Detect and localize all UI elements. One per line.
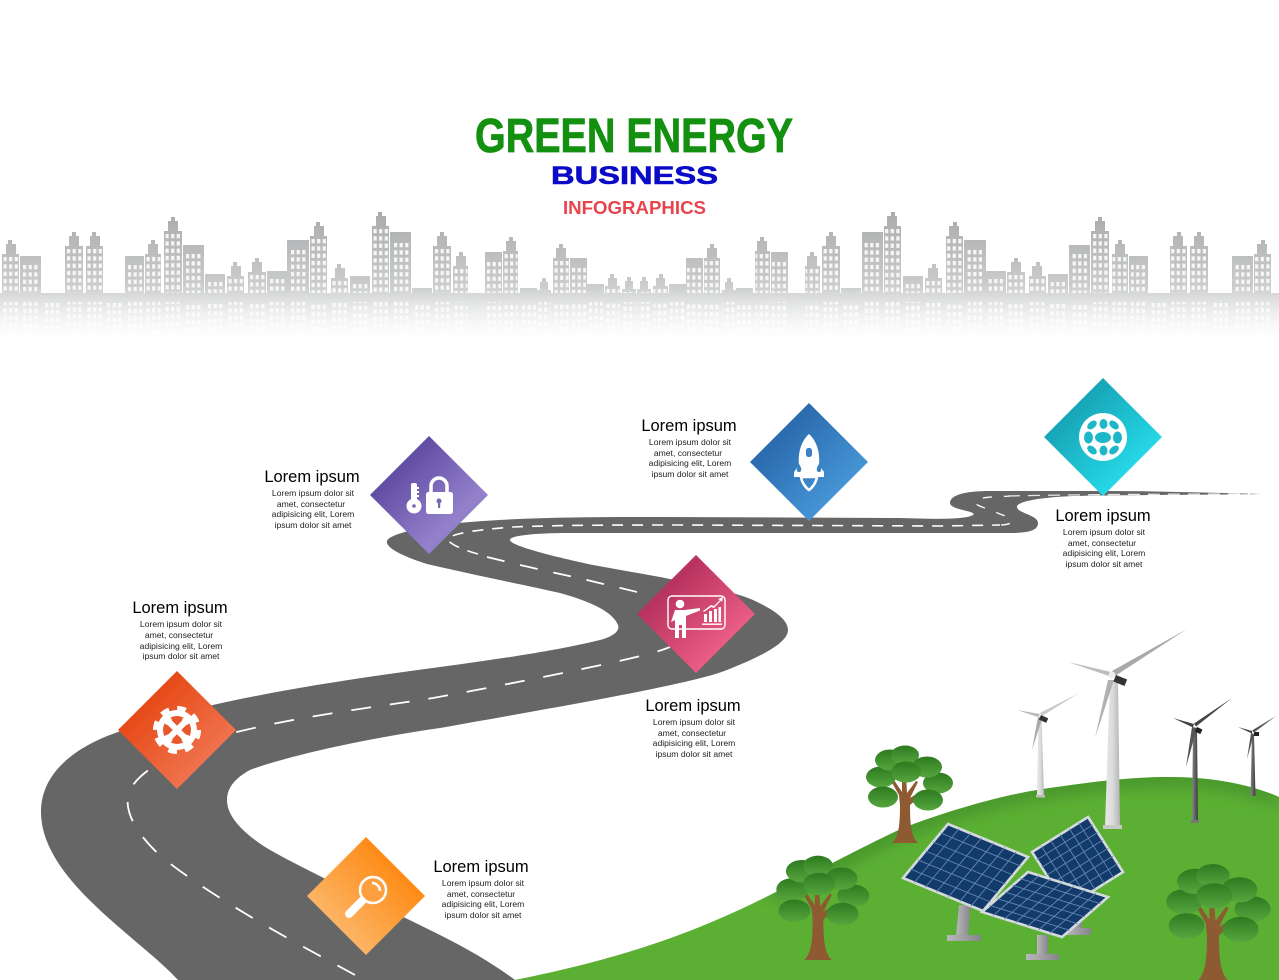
text block: orange step: Lorem ipsum — [433, 858, 529, 876]
step 3: pink diamond — [637, 555, 755, 673]
tree: right — [1166, 864, 1271, 980]
text block: blue step: amet, consectetur — [654, 448, 722, 458]
text block: purple step: Lorem ipsum — [264, 468, 360, 486]
text block: orange step: adipisicing elit, Lorem — [442, 899, 524, 909]
text block: cyan step: adipisicing elit, Lorem — [1063, 548, 1145, 558]
text block: purple step: ipsum dolor sit amet — [275, 520, 352, 530]
text block: purple step: amet, consectetur — [277, 499, 345, 509]
title line: green energy: GREEN ENERGY — [475, 110, 793, 163]
solar panel: back right — [1032, 817, 1123, 907]
text block: cyan step: Lorem ipsum — [1055, 507, 1151, 525]
step 4: purple diamond — [370, 436, 488, 554]
text block: red step: ipsum dolor sit amet — [143, 651, 220, 661]
wind turbine: dark medium — [1173, 698, 1232, 823]
text block: cyan step — [1055, 507, 1151, 569]
tree: upper — [866, 746, 953, 843]
text block: pink step: amet, consectetur — [658, 728, 726, 738]
text block: pink step — [645, 697, 741, 759]
text block: purple step — [264, 468, 360, 530]
text block: orange step: ipsum dolor sit amet — [445, 910, 522, 920]
text block: orange step — [433, 858, 529, 920]
panel stand: back — [1065, 900, 1091, 935]
step 5: blue diamond — [750, 403, 868, 521]
wind turbine: dark small — [1238, 716, 1276, 796]
text block: red step — [132, 599, 228, 661]
text block: blue step: Lorem ipsum dolor sit — [649, 437, 732, 447]
step 2: orange diamond — [307, 837, 425, 955]
solar panel: front — [982, 872, 1108, 937]
text block: pink step: Lorem ipsum — [645, 697, 741, 715]
icon: gear with wrenches — [156, 709, 198, 751]
step 6: cyan diamond — [1044, 378, 1162, 496]
icon: key and padlock — [406, 478, 453, 514]
icon: magnifier — [349, 877, 386, 914]
panel stand: left — [947, 905, 981, 941]
city skyline — [0, 212, 1279, 340]
panel stand: front — [1026, 935, 1059, 960]
text block: purple step: adipisicing elit, Lorem — [272, 509, 354, 519]
text block: purple step: Lorem ipsum dolor sit — [272, 488, 355, 498]
icon: rocket — [794, 434, 824, 490]
hill — [515, 777, 1279, 980]
solar panel: left — [903, 824, 1028, 911]
text block: cyan step: amet, consectetur — [1068, 538, 1136, 548]
text block: cyan step: Lorem ipsum dolor sit — [1063, 527, 1146, 537]
road surface — [41, 491, 1262, 980]
solar panels — [903, 817, 1123, 960]
text block: pink step: ipsum dolor sit amet — [656, 749, 733, 759]
text block: orange step: amet, consectetur — [447, 889, 515, 899]
icon: globe — [1079, 413, 1127, 461]
text block: red step: amet, consectetur — [145, 630, 213, 640]
text block: blue step: Lorem ipsum — [641, 417, 737, 435]
wind turbine: large light — [1068, 629, 1187, 829]
title — [475, 110, 793, 218]
title line: business: BUSINESS — [551, 162, 718, 190]
road centre dashes — [128, 494, 1250, 975]
text block: orange step: Lorem ipsum dolor sit — [442, 878, 525, 888]
title line: infographics: INFOGRAPHICS — [563, 197, 706, 218]
road — [41, 491, 1262, 980]
text block: red step: Lorem ipsum dolor sit — [140, 619, 223, 629]
text block: blue step: ipsum dolor sit amet — [652, 469, 729, 479]
step 1: red diamond — [118, 671, 236, 789]
tree: left — [776, 856, 869, 960]
text block: pink step: adipisicing elit, Lorem — [653, 738, 735, 748]
text block: blue step: adipisicing elit, Lorem — [649, 458, 731, 468]
text block: pink step: Lorem ipsum dolor sit — [653, 717, 736, 727]
text block: red step: Lorem ipsum — [132, 599, 228, 617]
wind turbine: small light — [1017, 693, 1079, 798]
text block: cyan step: ipsum dolor sit amet — [1066, 559, 1143, 569]
icon: presenter with chart — [668, 596, 725, 638]
text block: blue step — [641, 417, 737, 479]
text block: red step: adipisicing elit, Lorem — [140, 641, 222, 651]
